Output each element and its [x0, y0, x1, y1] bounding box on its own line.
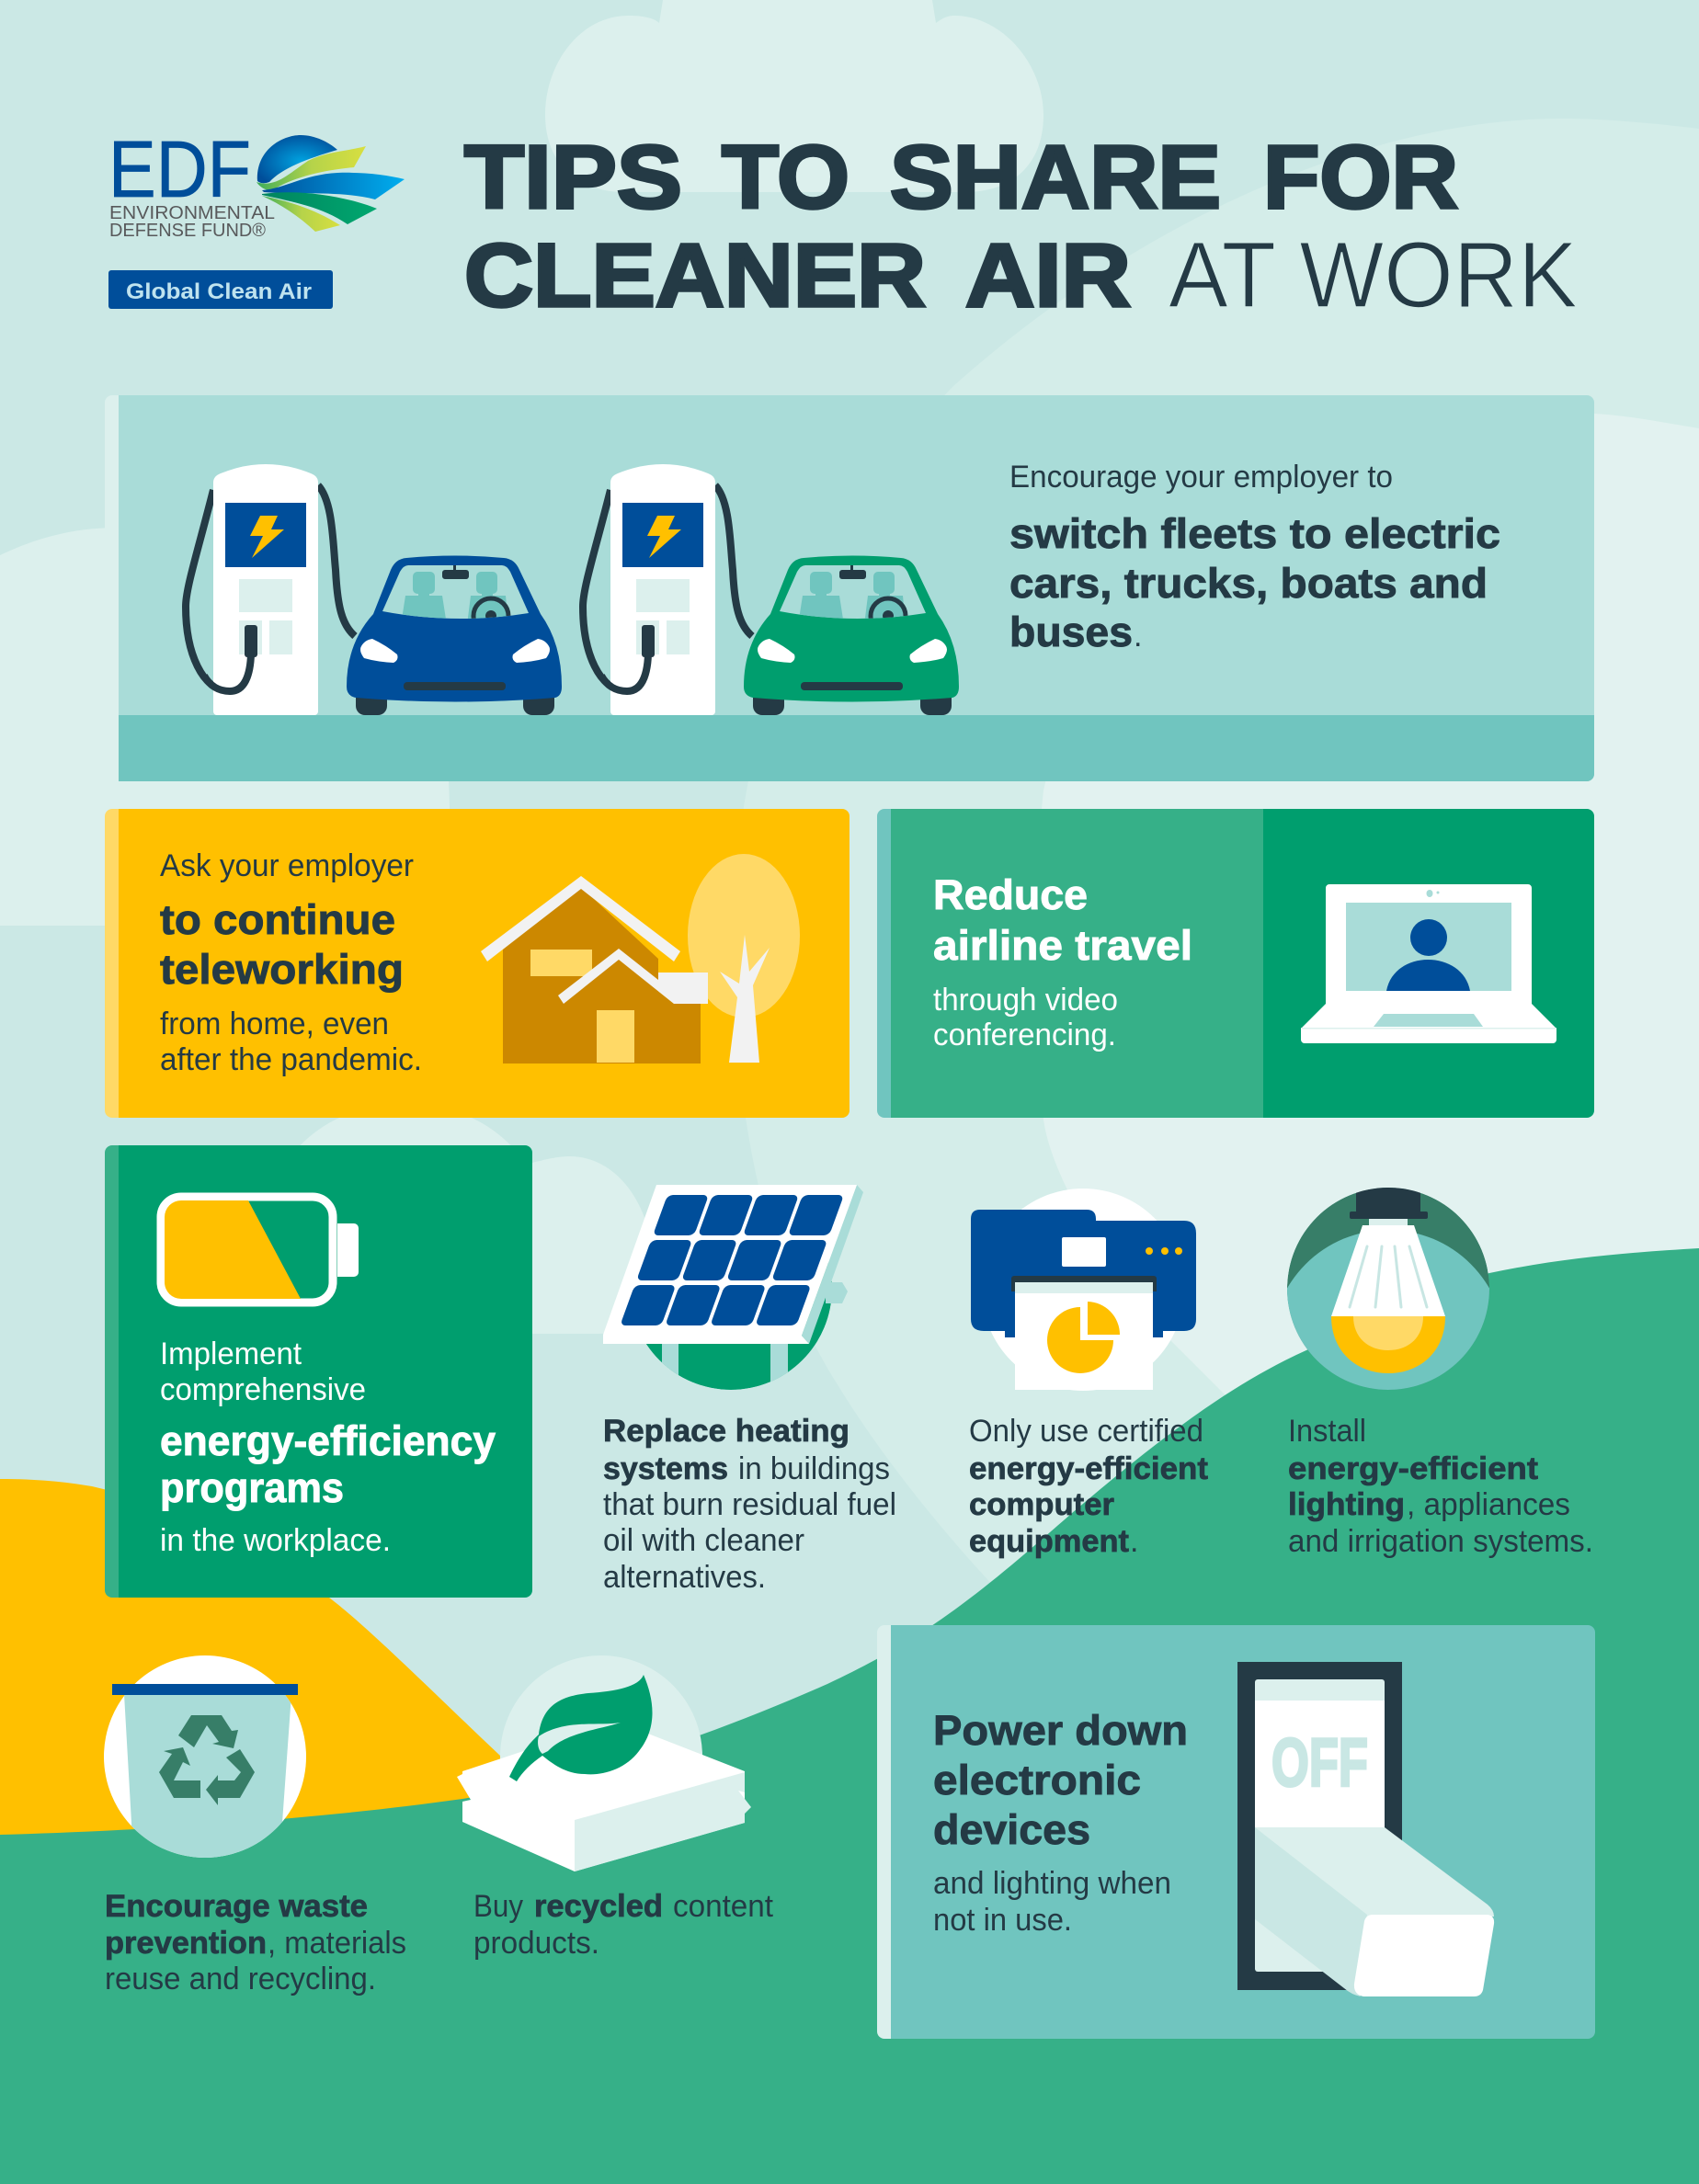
text: teleworking tip: after the pandemic.	[160, 1042, 422, 1077]
icon: paper stack and leaf	[457, 1655, 751, 1871]
text: efficiency tip	[160, 1337, 496, 1558]
text: efficiency tip: energy-efficiency	[160, 1417, 496, 1464]
title: AIR	[965, 225, 1131, 325]
tip: recycled products	[457, 1655, 774, 1961]
text: fleets tip: cars, trucks, boats and	[1009, 560, 1488, 607]
text: airline tip: Reduce	[933, 871, 1088, 918]
text: power tip: and lighting when	[933, 1866, 1171, 1901]
text: heating tip: in buildings	[738, 1451, 890, 1486]
icon: light bulb	[1287, 1188, 1489, 1390]
text: heating tip: that burn residual fuel	[603, 1487, 896, 1522]
text: recycled tip: products.	[473, 1926, 599, 1961]
text: power tip: electronic	[933, 1757, 1141, 1803]
text: power tip: devices	[933, 1806, 1090, 1853]
text: waste tip	[105, 1889, 406, 1996]
text: teleworking tip: to continue	[160, 896, 395, 943]
text: waste tip: prevention	[105, 1926, 267, 1961]
text: heating tip: oil with cleaner	[603, 1523, 804, 1558]
tip: replace heating systems	[603, 1185, 896, 1595]
badge: Global Clean Air	[108, 270, 333, 309]
title	[464, 127, 1578, 327]
text: teleworking tip: Ask your employer	[160, 848, 414, 883]
text: power tip: not in use.	[933, 1903, 1072, 1938]
text: computer tip: equipment	[969, 1524, 1129, 1559]
logo: EDF	[108, 125, 405, 241]
text: computer tip: .	[1130, 1524, 1138, 1559]
tip: computer equipment	[969, 1189, 1208, 1559]
text: recycled tip: recycled	[534, 1889, 663, 1924]
panel: reduce airline travel	[877, 809, 1594, 1118]
text: recycled tip: Buy	[473, 1889, 523, 1924]
title: FOR	[1263, 127, 1458, 227]
text: heating tip	[603, 1414, 896, 1595]
panel: power down	[877, 1625, 1595, 2039]
text: lighting tip: and irrigation systems.	[1288, 1524, 1593, 1559]
panel: continue teleworking	[105, 809, 850, 1118]
icon: charging station and blue car	[186, 464, 562, 715]
text: computer tip	[969, 1414, 1208, 1559]
tip: efficient lighting	[1271, 1188, 1593, 1559]
text: recycled tip: content	[673, 1889, 774, 1924]
text: airline tip	[933, 871, 1192, 1052]
text: waste tip: , materials	[268, 1926, 406, 1961]
text: fleets tip	[1009, 460, 1500, 655]
logo: EDF: EDF	[108, 125, 251, 214]
icon: charging station and green car	[583, 464, 959, 715]
text: lighting tip: , appliances	[1407, 1487, 1570, 1522]
text: power tip: Power down	[933, 1707, 1188, 1754]
title: AT WORK	[1169, 222, 1578, 327]
text: fleets tip: switch fleets to electric	[1009, 510, 1500, 557]
text: recycled tip	[473, 1889, 774, 1961]
panel: energy-efficiency programs	[105, 1145, 532, 1598]
icon: light switch off: OFF	[1271, 1724, 1368, 1801]
text: efficiency tip: programs	[160, 1464, 344, 1511]
text: heating tip: alternatives.	[603, 1560, 766, 1595]
text: teleworking tip	[160, 848, 422, 1077]
title: TO	[722, 127, 850, 227]
panel: switch fleets to electric	[105, 395, 1594, 781]
text: airline tip: conferencing.	[933, 1018, 1116, 1052]
title: CLEANER	[464, 225, 926, 325]
text: computer tip: Only use certified	[969, 1414, 1203, 1449]
text: computer tip: energy-efficient	[969, 1451, 1208, 1486]
text: teleworking tip: teleworking	[160, 946, 404, 993]
text: teleworking tip: from home, even	[160, 1007, 389, 1041]
text: lighting tip: lighting	[1288, 1487, 1405, 1522]
title: TIPS	[464, 127, 682, 227]
text: heating tip: Replace heating	[603, 1414, 850, 1449]
text: fleets tip: .	[1134, 619, 1142, 654]
icon: house and tree	[481, 854, 800, 1064]
title: SHARE	[890, 127, 1221, 227]
text: heating tip: systems	[603, 1451, 728, 1486]
text: efficiency tip: comprehensive	[160, 1372, 366, 1407]
icon: printer	[971, 1189, 1196, 1391]
logo: EDF: ENVIRONMENTAL	[109, 203, 275, 223]
text: lighting tip	[1288, 1414, 1593, 1559]
logo: EDF: DEFENSE FUND®	[109, 221, 266, 241]
icon: light switch off	[1237, 1662, 1494, 1996]
tip: waste prevention	[104, 1655, 406, 1996]
badge: Global Clean Air: Global Clean Air	[126, 279, 312, 304]
text: lighting tip: Install	[1288, 1414, 1366, 1449]
text: fleets tip: buses	[1009, 609, 1133, 655]
icon: solar panel	[603, 1185, 863, 1397]
icon: battery	[161, 1197, 359, 1302]
text: waste tip: reuse and recycling.	[105, 1962, 376, 1996]
text: airline tip: through video	[933, 983, 1118, 1018]
text: fleets tip: Encourage your employer to	[1009, 460, 1393, 495]
text: efficiency tip: Implement	[160, 1337, 302, 1371]
text: waste tip: Encourage waste	[105, 1889, 368, 1924]
text: airline tip: airline travel	[933, 922, 1192, 969]
text: efficiency tip: in the workplace.	[160, 1523, 391, 1558]
text: lighting tip: energy-efficient	[1288, 1451, 1538, 1486]
text: power tip	[933, 1707, 1188, 1938]
text: computer tip: computer	[969, 1487, 1114, 1522]
icon: recycling bin	[104, 1655, 306, 1866]
icon: laptop video call	[1301, 884, 1556, 1043]
